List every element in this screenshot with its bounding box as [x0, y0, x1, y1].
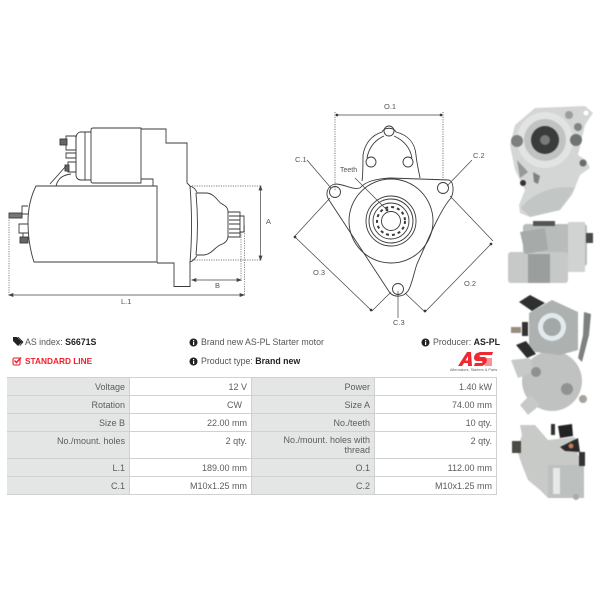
label B: B [215, 281, 220, 290]
row: C.1 / C.2 [7, 477, 496, 494]
row: mounting holes [7, 432, 496, 458]
photo: opposite side view of starter [511, 423, 586, 500]
row: C.1 / C.2: C.1 [111, 481, 125, 491]
mounting hole C3 [392, 284, 404, 294]
row: voltage / power: Voltage [95, 382, 125, 392]
row: C.1 / C.2: M10x1.25 mm [435, 481, 492, 491]
photo: side view of starter [508, 220, 594, 284]
label O.2: O.2 [464, 279, 476, 288]
drive housing [141, 129, 192, 286]
row: C.1 / C.2: M10x1.25 mm [190, 481, 247, 491]
specification table [7, 378, 497, 495]
row: size B / teeth: Size B [99, 418, 125, 428]
central nose and gear [349, 179, 433, 263]
label C.3: C.3 [393, 318, 405, 327]
row: size B / teeth: 10 qty. [466, 418, 492, 428]
badge: standard line: STANDARD LINE [25, 356, 92, 366]
label L.1: L.1 [121, 297, 131, 306]
logo: AS-PL [450, 352, 498, 372]
row: voltage / power: 1.40 kW [459, 382, 492, 392]
row: size B / teeth [7, 414, 496, 431]
row: rotation / size A: CW [227, 400, 242, 410]
row: L.1 / O.1: L.1 [112, 463, 125, 473]
mounting hole C1 [330, 186, 340, 198]
row: size B / teeth: 22.00 mm [207, 418, 247, 428]
info row: producer: Producer: AS-PL [433, 337, 500, 347]
label A: A [266, 217, 271, 226]
row: voltage / power: 12 V [228, 382, 247, 392]
logo: AS-PL: Alternators, Starters & Parts [450, 368, 497, 372]
rear terminals [9, 206, 28, 243]
row: L.1 / O.1: 189.00 mm [202, 463, 247, 473]
row: L.1 / O.1: 112.00 mm [448, 463, 492, 473]
row: rotation / size A: Size A [344, 400, 370, 410]
O.2 dimension [405, 196, 493, 312]
row: mounting holes: thread [344, 445, 370, 455]
O.3 dimension [294, 198, 391, 311]
icon: info [422, 338, 430, 346]
info row: description: Brand new AS-PL Starter motor [201, 337, 324, 347]
icon: info [190, 338, 198, 346]
label C.1: C.1 [295, 155, 307, 164]
callout leader lines [307, 160, 472, 318]
row: size B / teeth: No./teeth [333, 418, 370, 428]
solenoid [50, 128, 141, 186]
row: C.1 / C.2: C.2 [356, 481, 370, 491]
label C.2: C.2 [473, 151, 485, 160]
dimension L1 arrow [9, 294, 244, 296]
row: voltage / power: Power [344, 382, 370, 392]
photo: rear view of starter [510, 294, 592, 415]
flange outline [327, 178, 453, 296]
label Teeth: Teeth [340, 167, 357, 174]
row: rotation / size A [7, 396, 496, 413]
row: mounting holes: 2 qty. [471, 436, 492, 446]
logo mark [458, 352, 493, 366]
side view technical drawing [8, 128, 262, 297]
motor housing [28, 186, 157, 262]
dimension B arrow [192, 278, 241, 282]
info row: AS index: AS index: S6671S [25, 337, 96, 347]
row: L.1 / O.1: O.1 [355, 463, 370, 473]
dimension A arrow [259, 186, 262, 260]
dimension lines [9, 186, 262, 296]
icon: tags [13, 337, 24, 346]
row: mounting holes: No./mount. holes [57, 436, 125, 446]
O.1 dimension [335, 112, 443, 190]
row: rotation / size A: Rotation [91, 400, 125, 410]
nose cone [190, 186, 228, 262]
label O.3: O.3 [313, 268, 325, 277]
row: mounting holes: 2 qty. [226, 436, 247, 446]
solenoid mount bracket [362, 126, 420, 181]
icon: info [190, 358, 198, 366]
front view technical drawing [294, 112, 494, 318]
mounting hole C2 [438, 182, 448, 194]
photo: front view of starter [510, 106, 593, 218]
row: rotation / size A: 74.00 mm [452, 400, 492, 410]
row: voltage / power [7, 378, 496, 395]
label O.1: O.1 [384, 102, 396, 111]
row: mounting holes: No./mount. holes with [283, 435, 370, 445]
pinion gear [228, 212, 244, 237]
row: L.1 / O.1 [7, 459, 496, 476]
icon: red checkbox [12, 357, 22, 366]
info row: product type: Product type: Brand new [201, 356, 300, 366]
